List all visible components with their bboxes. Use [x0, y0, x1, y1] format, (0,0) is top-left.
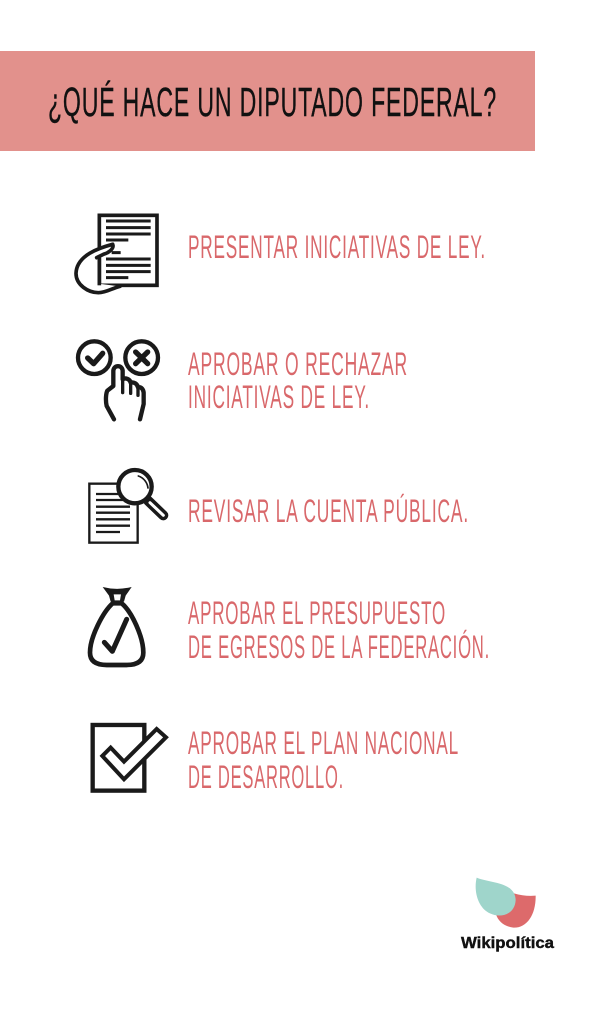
logo: Wikipolítica: Wikipolítica	[461, 935, 554, 952]
header banner	[0, 51, 535, 151]
icon: document and magnifying glass	[89, 470, 163, 543]
text: aprobar plan nacional: DE DESARROLLO.	[188, 759, 344, 795]
text: aprobar o rechazar: INICIATIVAS DE LEY.	[188, 379, 370, 415]
icon: approve or reject hand	[78, 341, 158, 419]
text: aprobar plan nacional	[188, 725, 459, 795]
icon: checkbox	[93, 725, 166, 791]
logo: Wikipolítica	[461, 878, 554, 952]
text: aprobar o rechazar	[188, 346, 408, 415]
text: aprobar o rechazar: APROBAR O RECHAZAR	[188, 346, 408, 382]
text: aprobar presupuesto	[188, 595, 490, 665]
icon: money bag with check	[90, 587, 143, 665]
icon: hand presenting document	[76, 215, 157, 293]
